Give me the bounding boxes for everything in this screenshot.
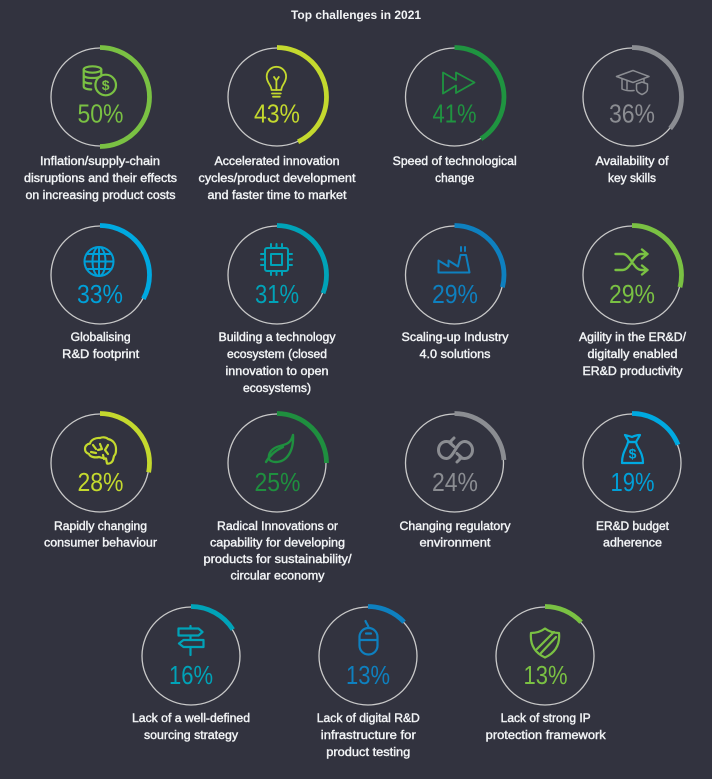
percentage 43%: 43% <box>254 99 300 129</box>
label: Globalising <box>71 332 131 344</box>
label: Building a technology <box>218 332 336 344</box>
ring gauge 41% <box>405 48 504 146</box>
panel: 29% industry 4.0 <box>402 226 509 361</box>
ring gauge 36% <box>582 48 682 146</box>
label: 4.0 solutions <box>420 349 491 361</box>
label: ecosystems) <box>243 383 311 395</box>
icon: coins and dollar: $ <box>102 77 110 93</box>
ring gauge 25% <box>228 414 326 512</box>
ring gauge 24% <box>405 414 504 512</box>
ring gauge 29% green <box>582 226 682 324</box>
percentage 29% blue: 29% <box>432 279 478 309</box>
icon: shield <box>531 628 559 658</box>
icon: globe <box>84 247 114 276</box>
panel: 24% regulatory environment <box>400 414 511 550</box>
panel: 31% technology ecosystem <box>218 226 336 395</box>
label: Availability of <box>596 156 669 168</box>
panel: 28% consumer behaviour <box>44 414 157 550</box>
icon: factory <box>438 247 470 272</box>
panel: 33% globalising <box>50 226 150 361</box>
label: innovation to open <box>226 366 328 378</box>
percentage 29% green: 29% <box>609 279 655 309</box>
label: products for sustainability/ <box>204 554 352 566</box>
panel: 41% speed of change <box>393 48 517 185</box>
label: circular economy <box>230 570 325 582</box>
percentage 24%: 24% <box>432 467 478 497</box>
percentage 31%: 31% <box>255 279 299 309</box>
label: infrastructure for <box>321 730 416 742</box>
percentage 19%: 19% <box>610 467 654 497</box>
label: ecosystem (closed <box>227 349 327 361</box>
panel: 36% key skills <box>582 48 682 185</box>
ring gauge 31% <box>228 226 326 324</box>
percentage 41%: 41% <box>432 99 476 129</box>
title: Top challenges in 2021 <box>291 10 422 22</box>
label: Lack of strong IP <box>501 713 591 725</box>
panel: 25% sustainability <box>204 414 352 582</box>
label: capability for developing <box>210 538 345 550</box>
label: Speed of technological <box>393 156 517 168</box>
label: Lack of digital R&D <box>317 713 420 725</box>
label: Accelerated innovation <box>214 156 340 168</box>
icon: infinity cycle arrows <box>438 438 472 462</box>
panel: 13% IP protection <box>486 606 606 742</box>
panel: 16% sourcing strategy <box>132 606 250 742</box>
label: and faster time to market <box>208 190 347 202</box>
label: Rapidly changing <box>54 521 147 533</box>
panel: 13% digital infrastructure <box>317 606 420 759</box>
label: Inflation/supply-chain <box>40 156 160 168</box>
icon: coins and dollar <box>84 66 116 95</box>
ring gauge 16% <box>142 606 240 706</box>
icon: computer mouse <box>360 621 378 654</box>
percentage 36%: 36% <box>609 99 655 129</box>
icon: brain <box>85 437 116 464</box>
percentage 16%: 16% <box>169 660 213 690</box>
panel: 29% agility <box>579 226 687 378</box>
percentage 28%: 28% <box>78 467 124 497</box>
label: on increasing product costs <box>26 190 176 202</box>
label: disruptions and their effects <box>24 173 177 185</box>
icon: microchip <box>261 244 292 275</box>
ring gauge 19% <box>582 414 682 512</box>
label: cycles/product development <box>198 173 356 185</box>
panel: 19% budget adherence <box>582 414 682 550</box>
label: R&D footprint <box>62 349 140 361</box>
label: Scaling-up Industry <box>402 332 509 344</box>
ring gauge 29% blue <box>405 226 504 324</box>
ring gauge 28% <box>50 414 150 512</box>
percentage 33%: 33% <box>77 279 123 309</box>
label: ER&D productivity <box>582 366 683 378</box>
icon: signpost <box>178 626 204 655</box>
label: consumer behaviour <box>44 538 157 550</box>
label: Radical Innovations or <box>217 521 338 533</box>
panel: 43% innovation cycles <box>198 48 356 202</box>
icon: fast forward <box>443 72 474 94</box>
label: Changing regulatory <box>400 521 511 533</box>
label: key skills <box>608 173 656 185</box>
percentage 13% blue: 13% <box>346 660 390 690</box>
ring gauge 33% <box>50 226 150 324</box>
percentage 13% green: 13% <box>524 660 568 690</box>
ring gauge 43% <box>228 48 326 146</box>
icon: shuffle arrows <box>616 250 648 274</box>
label: sourcing strategy <box>144 730 238 742</box>
percentage 25%: 25% <box>254 467 300 497</box>
percentage 50%: 50% <box>78 99 124 129</box>
icon: leaf <box>266 435 293 462</box>
ring gauge 50% <box>50 48 150 146</box>
panel: 50% inflation <box>24 48 177 202</box>
label: protection framework <box>486 730 606 742</box>
label: ER&D budget <box>596 521 670 533</box>
icon: money bag: $ <box>629 446 637 462</box>
label: change <box>435 173 474 185</box>
icon: graduation cap with shield <box>616 70 649 94</box>
label: Agility in the ER&D/ <box>579 332 687 344</box>
label: digitally enabled <box>588 349 678 361</box>
label: Lack of a well-defined <box>132 713 250 725</box>
icon: light bulb <box>267 67 286 97</box>
label: environment <box>420 538 491 550</box>
ring gauge 13% blue <box>318 606 418 706</box>
ring gauge 13% green <box>496 606 594 706</box>
label: adherence <box>603 538 662 550</box>
label: product testing <box>326 747 410 759</box>
